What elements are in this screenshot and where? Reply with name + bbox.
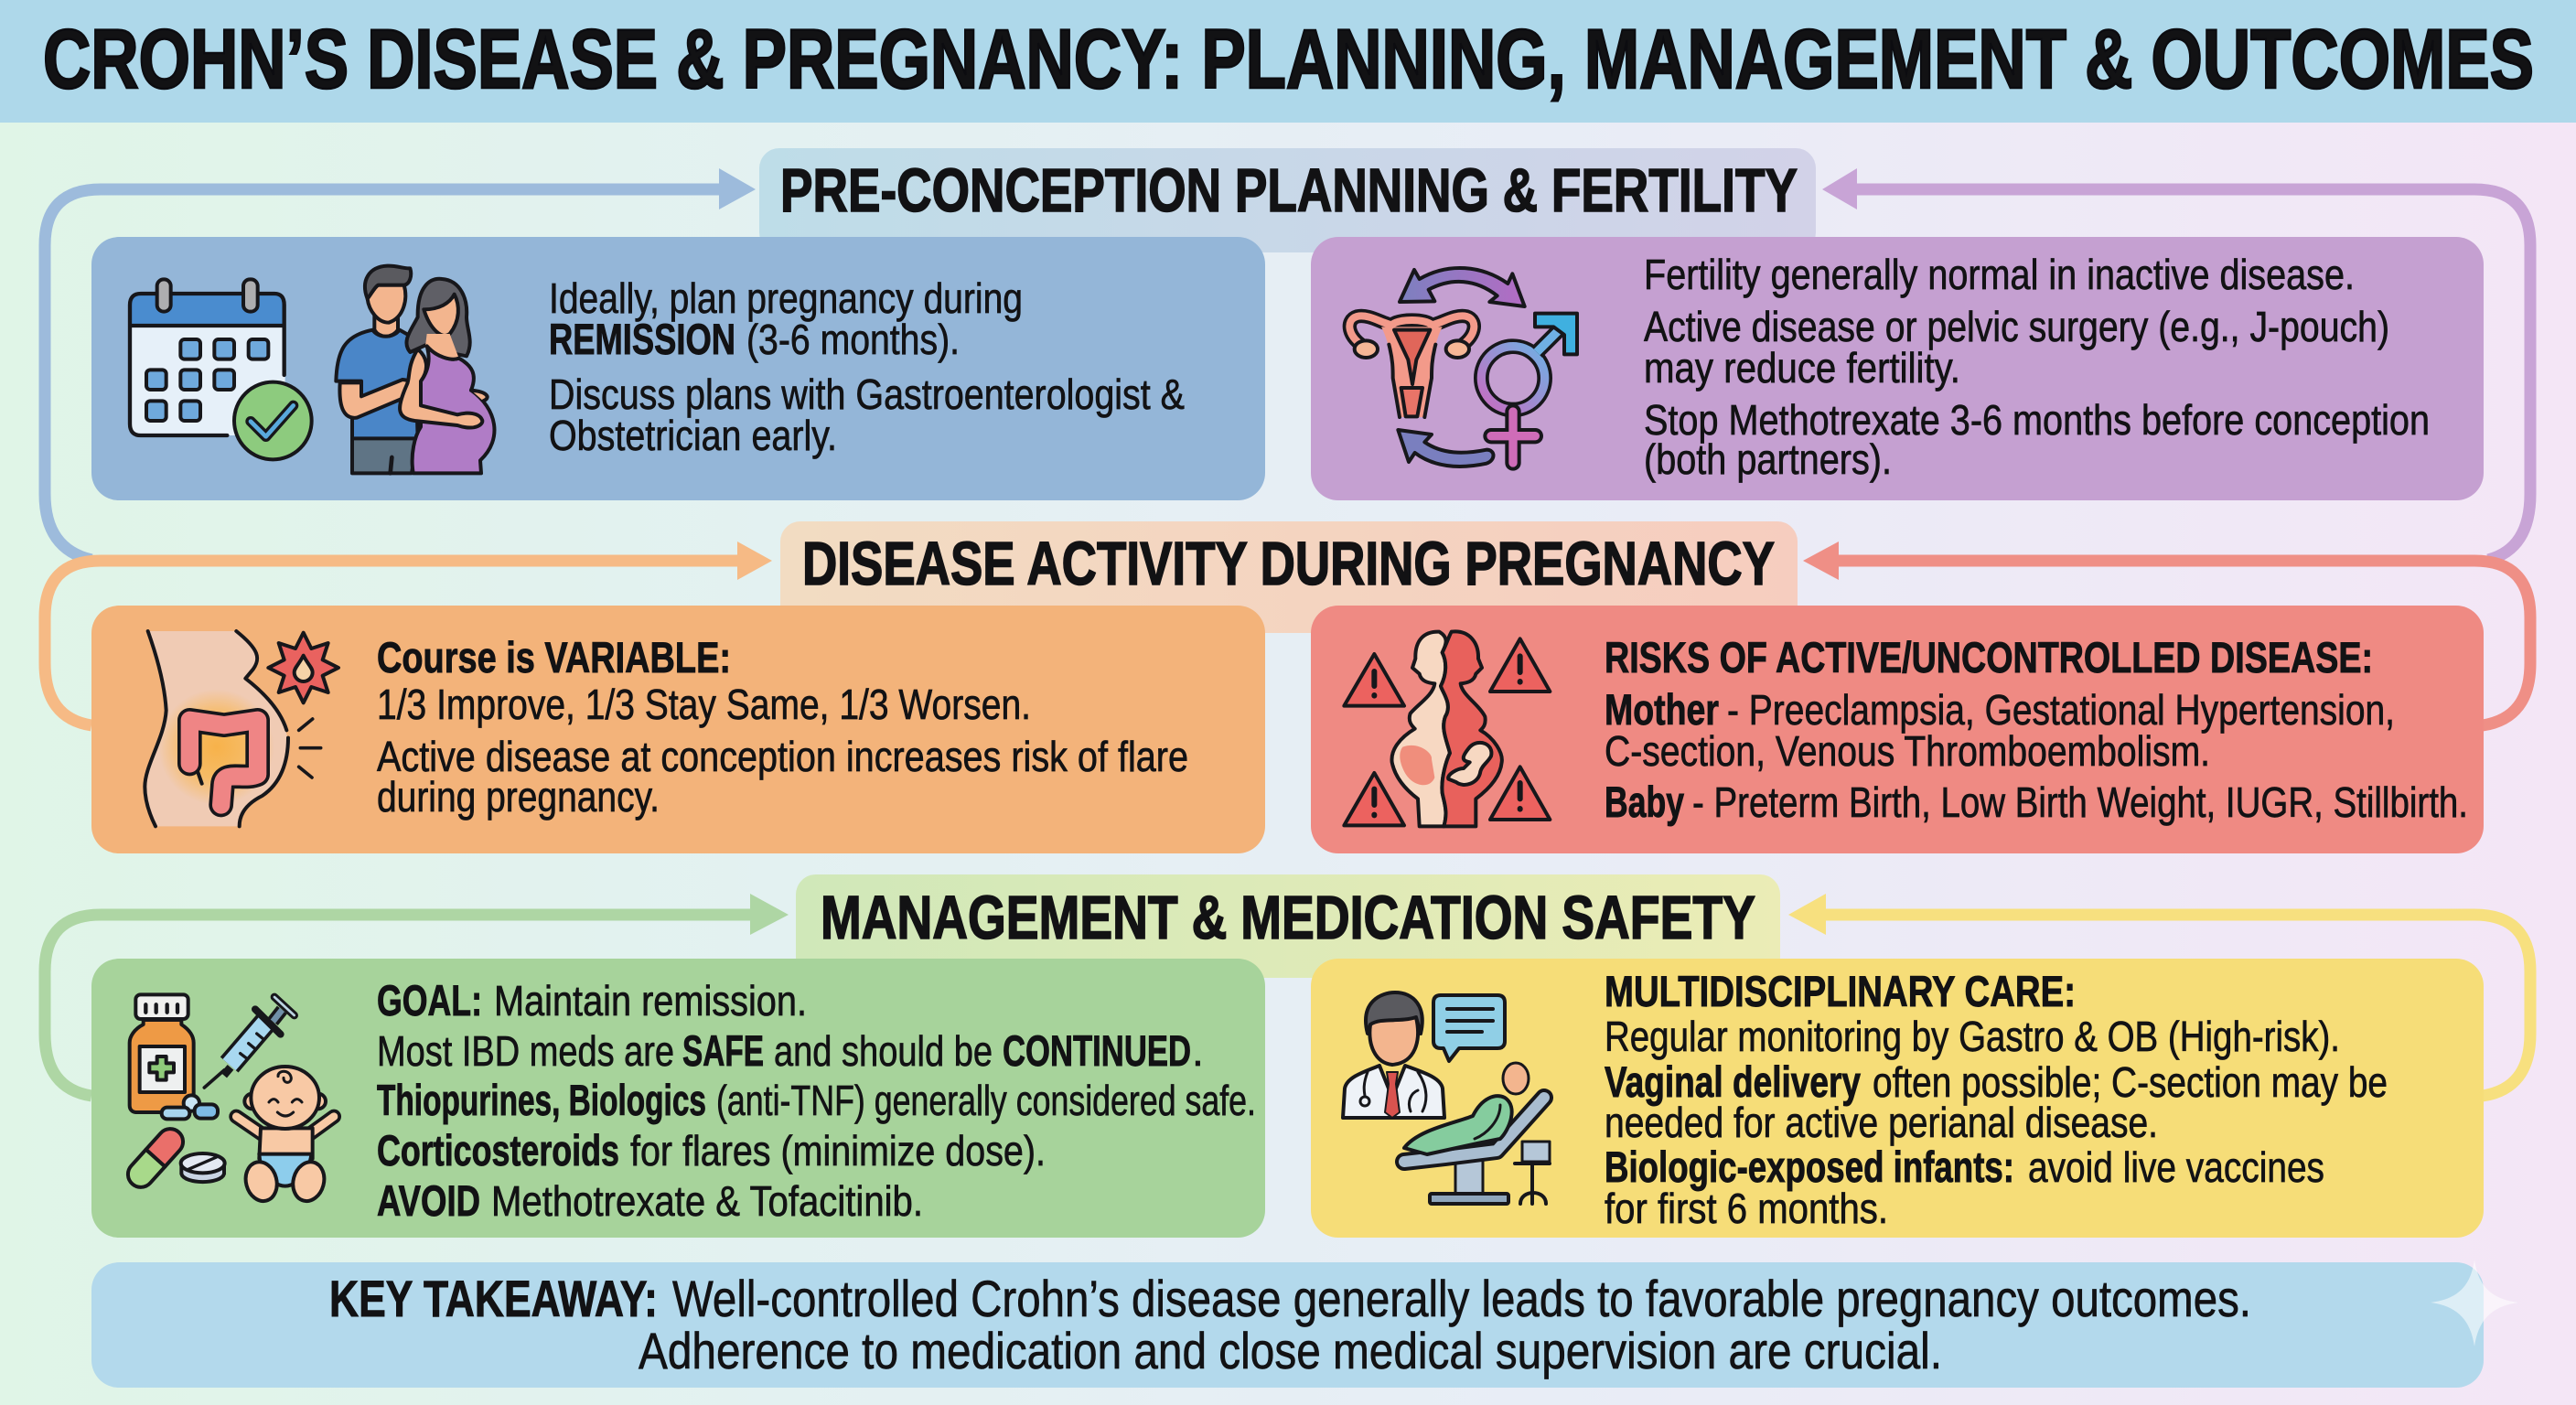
text: medication guidance: CONTINUED xyxy=(1003,1026,1191,1075)
icon: sparkle xyxy=(2431,1260,2518,1346)
panel: planning during remission xyxy=(91,237,1265,500)
text: care team guidance: often possible; C-section may be xyxy=(1873,1058,2388,1106)
arrow: purple loop into pre-conception heading xyxy=(1822,168,2530,560)
heading: management and medication safety xyxy=(796,874,1780,978)
icon: abdomen with inflamed colon xyxy=(145,631,338,826)
panel: risks of active disease xyxy=(1311,606,2484,853)
text: care team guidance: avoid live vaccines xyxy=(2028,1143,2324,1191)
text: medication guidance: AVOID xyxy=(377,1176,480,1225)
text: medication guidance xyxy=(377,976,1256,1225)
text: maternal and fetal risks: Mother xyxy=(1605,685,1719,734)
panel: variable disease course xyxy=(91,606,1265,853)
panel: medication goals xyxy=(91,959,1265,1238)
text: care team guidance: for first 6 months. xyxy=(1605,1185,1888,1232)
panel: key takeaway: Well-controlled Crohn’s disease generally leads to favorable pregnancy outcomes. xyxy=(672,1270,2251,1327)
text: disease course: 1/3 Improve, 1/3 Stay Same, 1/3 Worsen. xyxy=(377,681,1031,728)
text: medication guidance: for flares (minimize dose). xyxy=(630,1127,1046,1174)
panel: key takeaway xyxy=(91,1262,2484,1388)
text: care team guidance: Vaginal delivery xyxy=(1605,1057,1861,1106)
text: maternal and fetal risks: RISKS OF ACTIVE/UNCONTROLLED DISEASE: xyxy=(1605,633,2373,681)
text: disease course xyxy=(377,633,1188,820)
text: fertility facts: Active disease or pelvic surgery (e.g., J-pouch) xyxy=(1644,303,2389,350)
arrow: red loop into disease activity heading xyxy=(1803,542,2530,725)
icon: pregnant silhouette with warning triangles xyxy=(1344,631,1550,826)
text: planning advice: Ideally, plan pregnancy during xyxy=(549,274,1023,322)
arrow: green loop into management heading xyxy=(45,894,789,1096)
text: medication guidance: . xyxy=(1192,1027,1204,1075)
text: maternal and fetal risks: C-section, Venous Thromboembolism. xyxy=(1605,727,2210,775)
text: fertility facts: may reduce fertility. xyxy=(1644,344,1960,391)
text: care team guidance: Biologic-exposed infants: xyxy=(1605,1142,2014,1191)
text: medication guidance: and should be xyxy=(774,1027,993,1075)
heading: pre-conception planning and fertility xyxy=(759,148,1816,252)
text: disease course: Active disease at conception increases risk of flare xyxy=(377,733,1188,780)
panel: multidisciplinary care xyxy=(1311,959,2484,1238)
heading: pre-conception planning and fertility: PRE-CONCEPTION PLANNING & FERTILITY xyxy=(780,156,1798,225)
arrow: yellow loop into management heading xyxy=(1788,894,2530,1096)
text: planning advice: Obstetrician early. xyxy=(549,412,837,459)
text: medication guidance: Corticosteroids xyxy=(377,1126,619,1174)
text: medication guidance: GOAL: xyxy=(377,976,482,1024)
text: disease course: Course is VARIABLE: xyxy=(377,633,731,681)
text: maternal and fetal risks: - Preeclampsia, Gestational Hypertension, xyxy=(1727,686,2395,734)
icon: medicine bottle, syringe, pills and baby xyxy=(123,994,334,1205)
panel: fertility xyxy=(1311,237,2484,500)
text: planning advice: REMISSION xyxy=(549,315,735,363)
text: fertility facts: Stop Methotrexate 3-6 months before conception xyxy=(1644,396,2430,444)
arrow: blue loop into pre-conception heading xyxy=(45,168,756,560)
heading: disease activity during pregnancy xyxy=(780,521,1798,633)
text: fertility facts: (both partners). xyxy=(1644,435,1892,483)
panel: key takeaway: KEY TAKEAWAY: xyxy=(329,1270,658,1327)
arrow: orange loop into disease activity heading xyxy=(45,542,772,725)
text: fertility facts xyxy=(1644,251,2430,483)
text: medication guidance: Thiopurines, Biologics xyxy=(377,1076,706,1124)
text: medication guidance: Maintain remission. xyxy=(494,977,807,1024)
text: care team guidance: MULTIDISCIPLINARY CARE: xyxy=(1605,967,2076,1015)
icon: doctor, speech bubble and patient on delivery chair xyxy=(1343,992,1550,1204)
text: planning advice: (3-6 months). xyxy=(746,316,960,363)
text: maternal and fetal risks: Baby xyxy=(1605,778,1684,826)
text: care team guidance: Regular monitoring by Gastro & OB (High-risk). xyxy=(1605,1013,2340,1060)
text: planning advice xyxy=(549,274,1185,459)
text: care team guidance: needed for active perianal disease. xyxy=(1605,1099,2158,1146)
icon: reproductive system and gender symbols with cycle arrows xyxy=(1349,268,1577,467)
text: medication guidance: (anti-TNF) generally considered safe. xyxy=(716,1077,1256,1124)
text: planning advice: Discuss plans with Gastroenterologist & xyxy=(549,370,1185,418)
icon: calendar with check mark xyxy=(130,279,312,459)
text: medication guidance: Methotrexate & Tofacitinib. xyxy=(491,1177,923,1225)
icon: expecting couple xyxy=(336,266,494,473)
text: medication guidance: Most IBD meds are xyxy=(377,1027,674,1075)
text: maternal and fetal risks xyxy=(1605,633,2468,826)
text: medication guidance: SAFE xyxy=(682,1026,764,1075)
panel: key takeaway: Adherence to medication and close medical supervision are crucial. xyxy=(639,1322,1942,1379)
heading: management and medication safety: MANAGEMENT & MEDICATION SAFETY xyxy=(821,884,1755,952)
text: care team guidance xyxy=(1605,967,2388,1232)
text: fertility facts: Fertility generally normal in inactive disease. xyxy=(1644,251,2355,298)
text: disease course: during pregnancy. xyxy=(377,773,660,820)
heading: disease activity during pregnancy: DISEASE ACTIVITY DURING PREGNANCY xyxy=(802,530,1775,598)
